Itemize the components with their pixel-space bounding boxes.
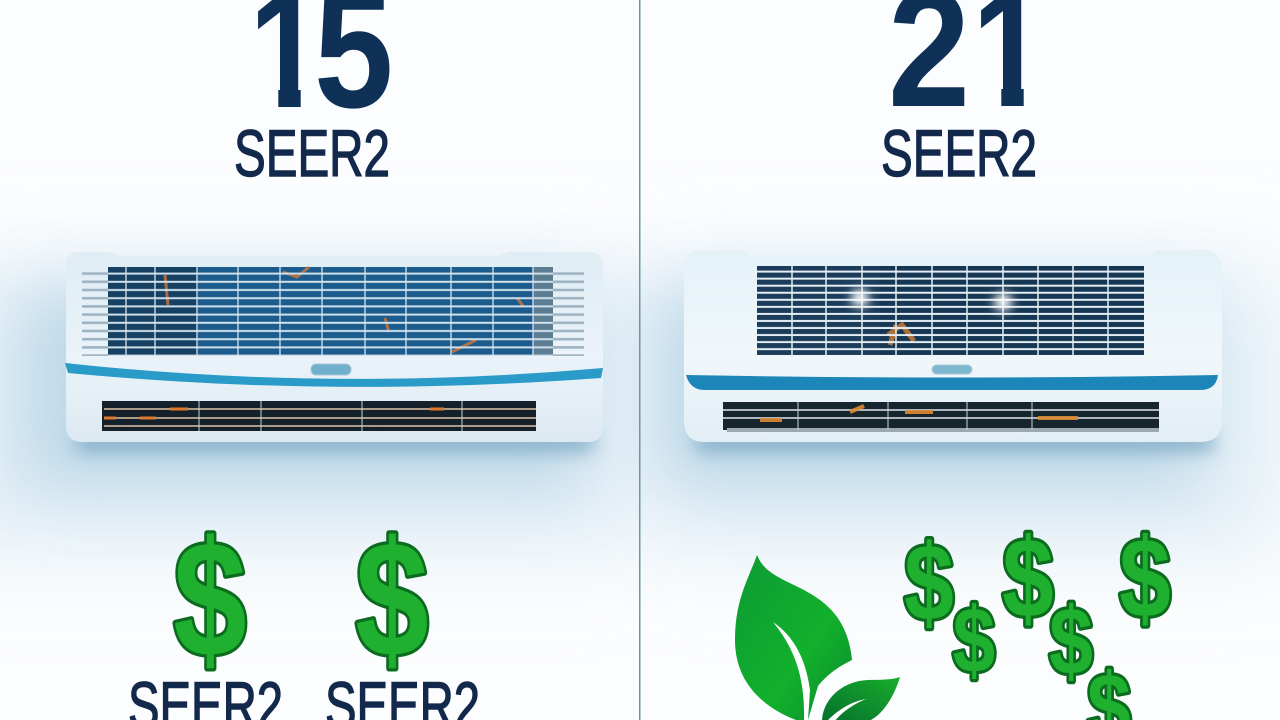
dollar sign: $ (173, 507, 247, 691)
label SEER2: SEER2 (881, 116, 1037, 190)
number 15 (240, 0, 393, 142)
number 21 (888, 0, 1066, 142)
label SEER2: SEER2 (234, 116, 390, 190)
scattered dollar signs (904, 514, 1171, 720)
light glow (994, 293, 1012, 311)
dollar sign: $ (1049, 588, 1093, 695)
display button (311, 364, 351, 375)
dollar sign: $ (355, 507, 429, 691)
upper grille (757, 266, 1144, 355)
light glow (851, 289, 869, 307)
air conditioner: 21 SEER2 (684, 250, 1222, 452)
leaf icon (735, 555, 900, 720)
dollar sign: $ (1002, 514, 1054, 641)
dollar signs and repeated label (128, 507, 480, 720)
dollar sign: $ (953, 589, 995, 693)
dollar sign: $ (1119, 514, 1171, 641)
panel: 15 SEER2 unit (65, 0, 603, 720)
panel: 21 SEER2 unit (684, 0, 1222, 720)
blue stripe (65, 363, 603, 387)
dollar sign: $ (904, 523, 954, 644)
air conditioner: 15 SEER2 (65, 252, 603, 452)
display button (932, 365, 972, 374)
upper grille (82, 267, 584, 356)
lower vent (102, 401, 536, 431)
lower vent (723, 402, 1159, 432)
blue stripe (686, 375, 1218, 390)
